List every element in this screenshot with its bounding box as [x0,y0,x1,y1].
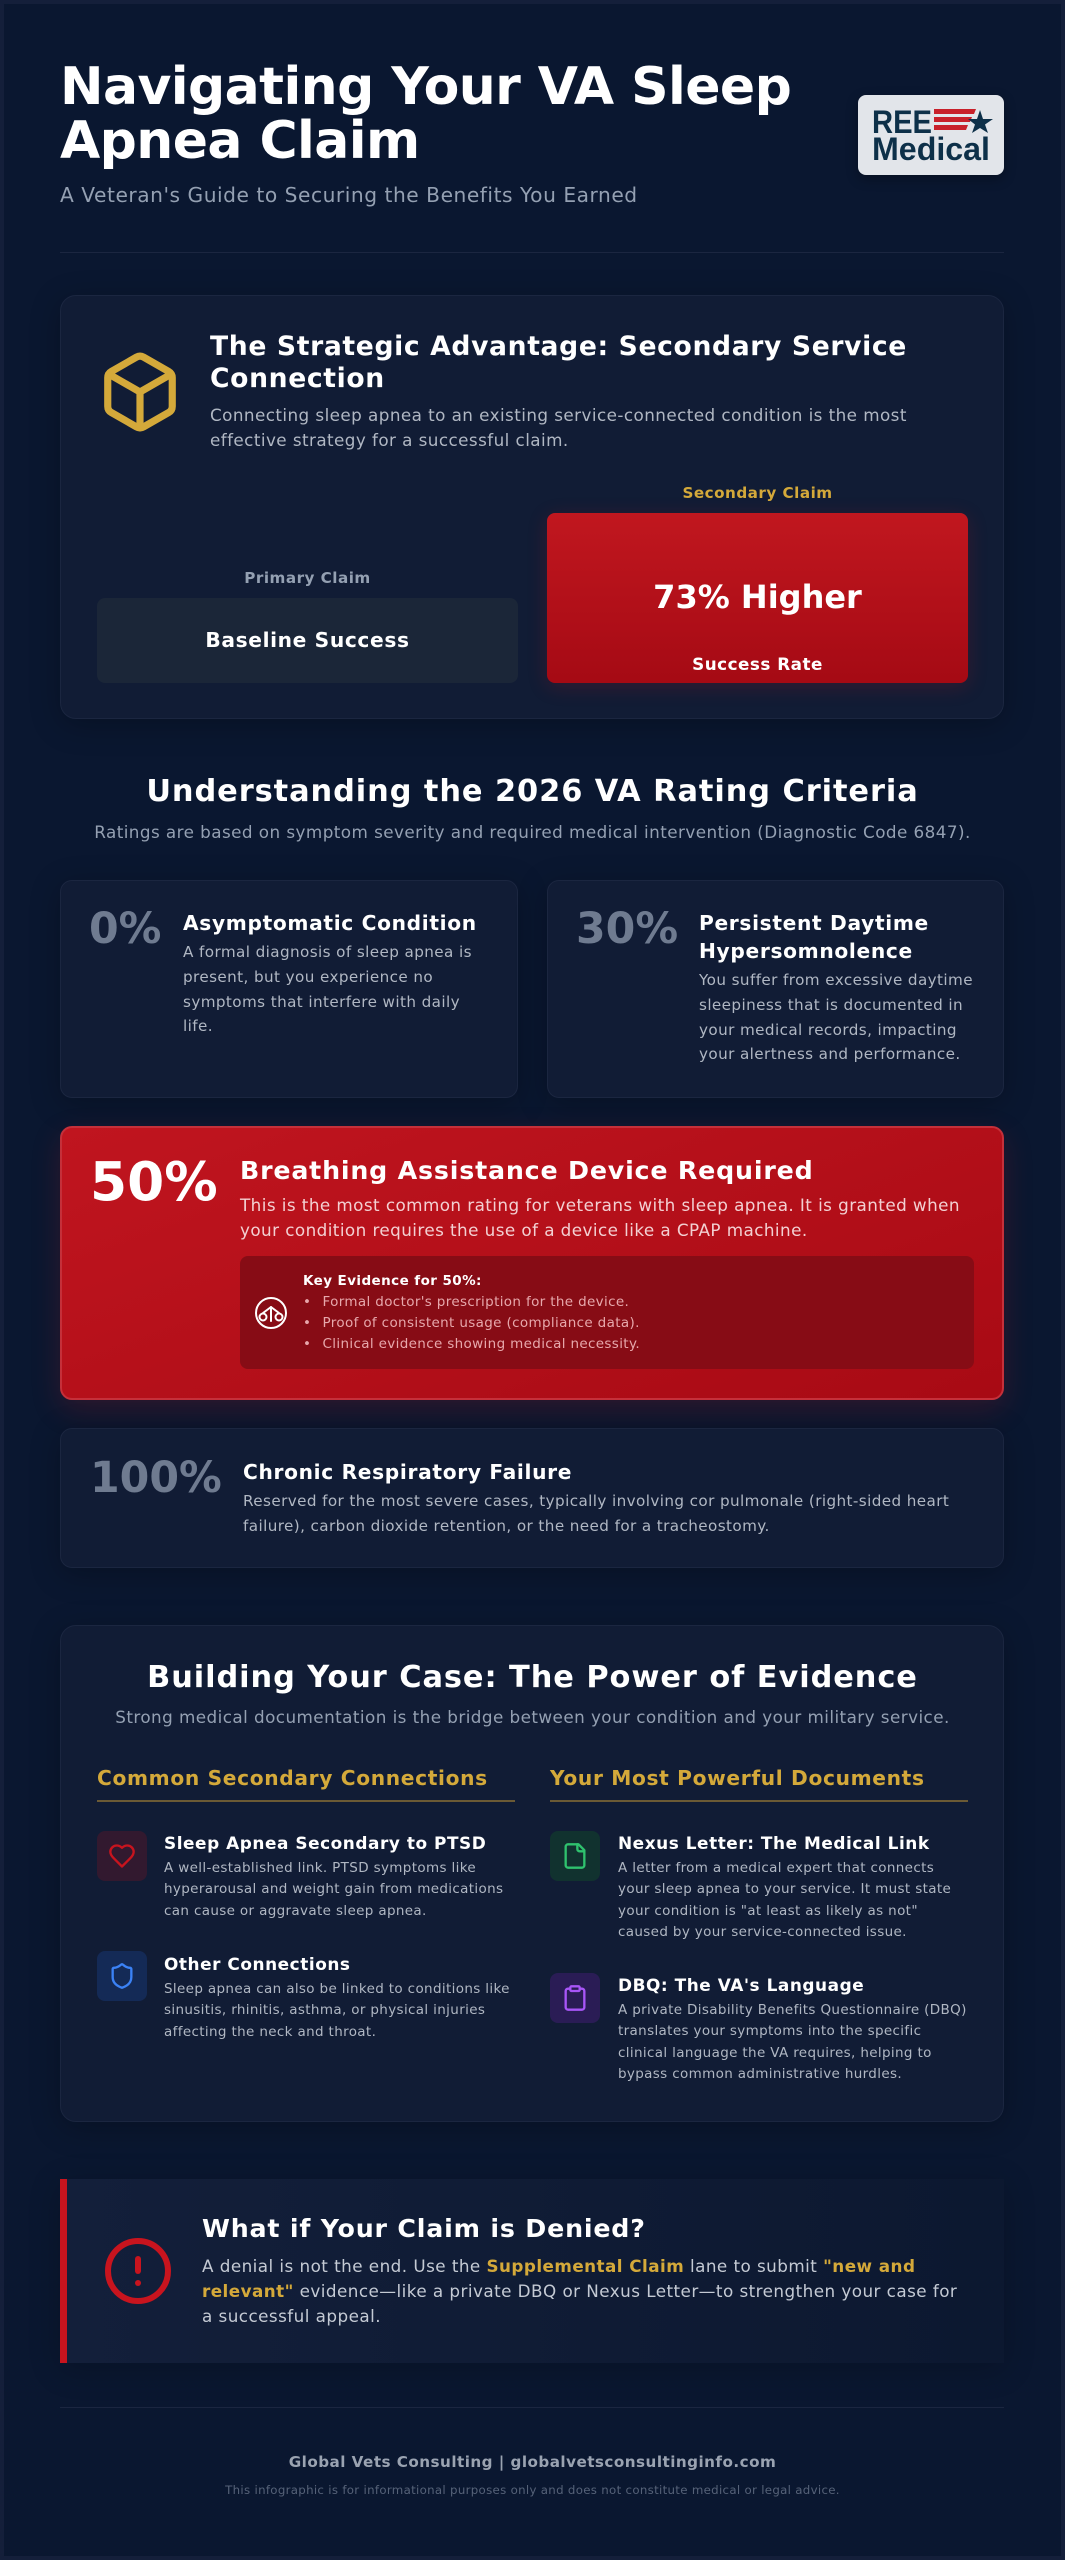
title: hypersomnolence: Hypersomnolence [699,939,913,963]
icon: heart [97,1831,147,1881]
item: other connections: sinusitis, rhinitis, asthma, or physical injuries [164,2002,485,2018]
text: asymptomatic: symptoms that interfere with daily [183,993,460,1011]
item: nexus letter: your condition is "at least as likely as not" [618,1903,918,1919]
title: claim denied: What if Your Claim is Denied? [202,2214,646,2243]
text: hypersomnolence: sleepiness that is documented in [699,996,963,1014]
item: DBQ: clinical language the VA requires, helping to [618,2045,932,2061]
list: key evidence: • [303,1315,311,1331]
logo: REE Medical: REE [872,104,932,140]
item: nexus letter [618,1833,951,1940]
list: key evidence: Proof of consistent usage (compliance data). [322,1315,640,1331]
text: chronic respiratory failure: Reserved for the most severe cases, typically involving cor pulmonale (right-sided heart [243,1492,949,1510]
panel: 50 percent [60,1126,1004,1400]
text: chronic respiratory failure: failure), carbon dioxide retention, or the need for a tracheostomy. [243,1517,770,1535]
panel: 0 percent [60,880,518,1098]
heading: strategic advantage [210,331,907,394]
icon: shield [97,1951,147,2001]
text: claim denied: a successful appeal. [202,2306,381,2326]
item: other connections [164,1954,510,2040]
item: nexus letter: your sleep apnea to your service. It must state [618,1881,951,1897]
item: nexus letter: A letter from a medical expert that connects [618,1860,934,1876]
logo: REE Medical: Medical [872,131,990,167]
text: claim denied: relevant" evidence—like a private DBQ or Nexus Letter—to strengthen your case for [202,2281,957,2301]
list: key evidence: Clinical evidence showing medical necessity. [322,1336,640,1352]
heading: common connections: Common Secondary Connections [97,1766,488,1790]
item: DBQ: DBQ: The VA's Language [618,1975,864,1995]
icon: alert [105,2238,171,2304]
text: chronic respiratory failure [243,1492,949,1535]
footer: organisation: Global Vets Consulting | globalvetsconsultinginfo.com [289,2453,776,2471]
item: PTSD: can cause or aggravate sleep apnea. [164,1903,427,1919]
title: key evidence: Key Evidence for 50%: [303,1273,482,1289]
icon: medical badge [255,1297,287,1329]
heading: powerful documents: Your Most Powerful Documents [550,1766,925,1790]
heading: strategic advantage: Connection [210,363,385,394]
title: chronic respiratory failure: Chronic Respiratory Failure [243,1460,572,1484]
title: hypersomnolence [699,911,929,963]
text: hypersomnolence [699,971,973,1063]
title: Navigating Your VA Sleep [60,57,791,117]
bar: baseline success [97,598,518,683]
text: asymptomatic: A formal diagnosis of sleep apnea is [183,943,472,961]
rating: 50%: 50% [90,1150,218,1213]
list: key evidence [303,1294,640,1352]
panel: key evidence [240,1256,974,1369]
item: other connections: Sleep apnea can also be linked to conditions like [164,1981,510,1997]
rating: 0%: 0% [89,904,161,954]
text: evidence subtitle: Strong medical documentation is the bridge between your condition and your military service. [115,1707,950,1727]
heading: common connections [97,1764,515,1802]
title: Apnea Claim [60,111,420,171]
text: strategic description [210,405,907,450]
text: asymptomatic [183,943,472,1035]
bar: 73% higher: Success Rate [692,654,823,674]
text: rating criteria subtitle: Ratings are based on symptom severity and required medical intervention (Diagnostic Code 6847). [94,822,971,842]
list: key evidence: Formal doctor's prescription for the device. [322,1294,629,1310]
text: strategic description: Connecting sleep apnea to an existing service-connected condition is the most [210,405,907,425]
label: primary claim: Primary Claim [244,569,371,587]
item: PTSD: A well-established link. PTSD symptoms like [164,1860,476,1876]
item: PTSD [164,1833,503,1919]
text: hypersomnolence: You suffer from excessive daytime [699,971,973,989]
panel: 30 percent [547,880,1004,1098]
bar: 73% higher: 73% Higher [653,578,862,616]
panel: evidence [60,1625,1004,2122]
heading: powerful documents [550,1764,968,1802]
bar: baseline success: Baseline Success [205,628,410,652]
title: asymptomatic: Asymptomatic Condition [183,911,477,935]
item: DBQ: translates your symptoms into the specific [618,2023,921,2039]
text: asymptomatic: life. [183,1017,213,1035]
text: breathing device: your condition requires the use of a device like a CPAP machine. [240,1220,808,1240]
list: key evidence: • [303,1294,311,1310]
panel: strategic advantage [60,295,1004,719]
item: DBQ: A private Disability Benefits Questionnaire (DBQ) [618,2002,967,2018]
text: hypersomnolence: your medical records, impacting [699,1021,957,1039]
text: hypersomnolence: your alertness and performance. [699,1045,961,1063]
rating: 30%: 30% [576,904,678,954]
item: other connections: Other Connections [164,1954,351,1974]
heading: strategic advantage: The Strategic Advantage: Secondary Service [210,331,907,362]
icon: box [104,352,176,432]
list: key evidence: • [303,1336,311,1352]
panel: 100 percent [60,1428,1004,1568]
item: DBQ: bypass common administrative hurdles. [618,2066,902,2082]
text: breathing device: This is the most common rating for veterans with sleep apnea. It is granted when [240,1195,960,1215]
text: strategic description: effective strategy for a successful claim. [210,430,569,450]
label: secondary claim: Secondary Claim [682,484,833,502]
logo: REE Medical [858,95,1004,175]
subtitle: A Veteran's Guide to Securing the Benefits You Earned [60,183,638,207]
bar: 73% higher [547,513,968,683]
item: PTSD: hyperarousal and weight gain from medications [164,1881,503,1897]
text: asymptomatic: present, but you experience no [183,968,433,986]
item: nexus letter: caused by your service-connected issue. [618,1924,907,1940]
item: nexus letter: Nexus Letter: The Medical Link [618,1833,930,1853]
heading: rating criteria: Understanding the 2026 VA Rating Criteria [146,774,919,809]
heading: evidence: Building Your Case: The Power of Evidence [147,1660,918,1695]
text: claim denied [202,2256,957,2326]
title: breathing device: Breathing Assistance Device Required [240,1156,813,1185]
title [60,57,791,171]
rating: 100%: 100% [90,1453,222,1503]
icon: clipboard [550,1973,600,2023]
panel: claim denied [60,2179,1004,2363]
item: DBQ [618,1975,967,2082]
text: breathing device [240,1195,960,1240]
item: other connections: affecting the neck and throat. [164,2024,376,2040]
icon: file [550,1831,600,1881]
footer: disclaimer: This infographic is for informational purposes only and does not constitute medical or legal advice. [225,2483,840,2497]
text: claim denied: A denial is not the end. Use the Supplemental Claim lane to submit "new and [202,2256,915,2276]
title: hypersomnolence: Persistent Daytime [699,911,929,935]
item: PTSD: Sleep Apnea Secondary to PTSD [164,1833,486,1853]
